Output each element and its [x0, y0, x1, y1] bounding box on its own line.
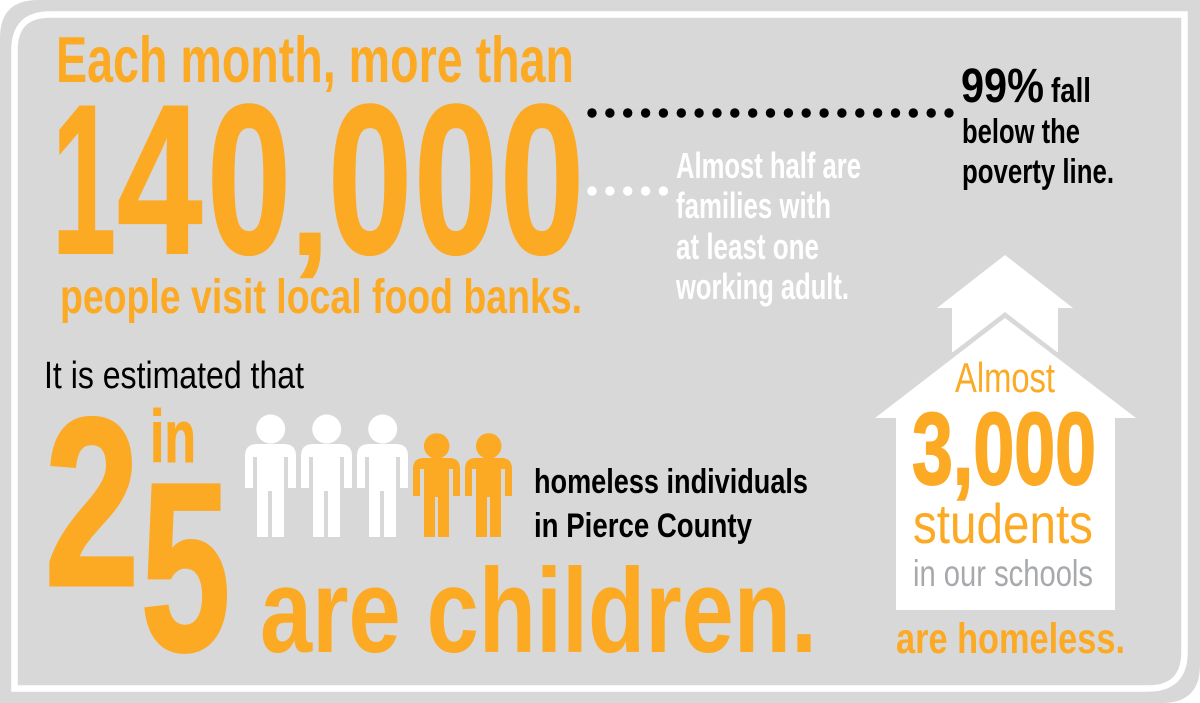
dotted connector: black	[587, 108, 954, 118]
text: almost: Almost	[955, 354, 1055, 401]
big number: 140,000: 0	[500, 62, 584, 299]
subheading: people visit local food banks: people visit local food banks.	[60, 271, 582, 324]
icon: white person	[301, 414, 352, 537]
text: students: students	[913, 492, 1093, 555]
icon: white person	[245, 414, 296, 537]
big number: 2: 2	[44, 368, 140, 636]
callout: working families: families with	[676, 185, 831, 226]
big number: 3,000: 3,000	[912, 392, 1096, 506]
word: in: in	[150, 395, 196, 478]
big number: 5: 5	[140, 433, 230, 701]
icon row: five people	[245, 414, 512, 537]
callout: 99 percent below poverty line: 99%	[961, 60, 1044, 113]
icon: orange person	[465, 433, 512, 537]
big number: 140,000: 4	[117, 61, 202, 299]
callout: working families: Almost half are	[676, 145, 861, 186]
icon: school house	[875, 255, 1136, 610]
callout: 99 percent below poverty line: below the	[962, 113, 1080, 151]
callout: 99 percent below poverty line: fall	[1051, 72, 1091, 110]
icon: white person	[357, 414, 408, 537]
big number: 140,000: ,	[289, 119, 331, 287]
big number: 140,000	[52, 61, 584, 299]
text: homeless individuals: homeless individuals	[534, 463, 808, 501]
dotted connector: white	[587, 186, 668, 196]
callout: 99 percent below poverty line	[961, 60, 1114, 191]
text: in our schools: in our schools	[913, 553, 1093, 594]
panel: children statistic	[44, 355, 817, 701]
callout: working families	[675, 145, 861, 307]
text: homeless individuals	[534, 463, 808, 545]
text: are homeless: are homeless.	[896, 615, 1125, 663]
text: homeless individuals: in Pierce County	[534, 507, 752, 545]
heading: are children: are children.	[260, 544, 817, 678]
big number: 140,000: 1	[52, 61, 116, 299]
panel: schoolhouse	[875, 255, 1136, 663]
callout: working families: at least one	[676, 226, 819, 267]
callout: 99 percent below poverty line: poverty line.	[962, 153, 1114, 191]
icon: orange person	[413, 433, 460, 537]
heading: each month: Each month, more than	[56, 23, 574, 96]
panel: food bank statistic	[52, 23, 584, 324]
callout: working families: working adult.	[675, 266, 849, 307]
big number: 140,000: 0	[328, 62, 412, 299]
big number: 140,000: 0	[414, 62, 498, 299]
big number: 140,000: 0	[207, 62, 291, 299]
intro text: It is estimated that	[44, 355, 304, 397]
